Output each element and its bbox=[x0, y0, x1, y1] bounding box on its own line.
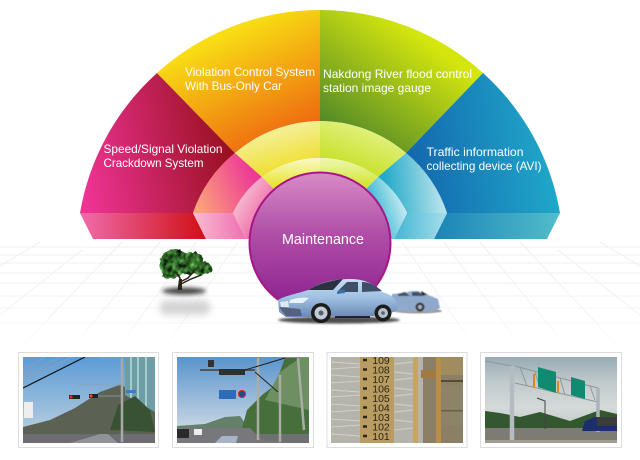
band drop shadow bbox=[95, 238, 545, 242]
photo: bus lane sign bbox=[172, 352, 314, 448]
panel: speed and signal violation sector bbox=[80, 73, 235, 239]
panel: speed and signal violation sector: Speed/Signal Violation bbox=[104, 142, 222, 156]
panel: speed and signal violation sector: Crackdown System bbox=[104, 156, 204, 170]
maintenance circle: Maintenance bbox=[282, 231, 364, 248]
photo: traffic signal bbox=[18, 352, 158, 448]
panel: violation control sector bbox=[157, 10, 320, 153]
floor grid bbox=[0, 238, 640, 350]
photo: flood gauge: 107 bbox=[372, 374, 390, 386]
photo: gantry sign bbox=[480, 352, 622, 448]
panel: violation control sector: Violation Control System bbox=[185, 65, 315, 79]
photo: flood gauge: 105 bbox=[372, 393, 390, 405]
icon: front car bbox=[278, 279, 400, 324]
inner ring bbox=[233, 158, 407, 239]
photo: flood gauge: 106 bbox=[372, 384, 390, 396]
icon: rear car bbox=[392, 291, 442, 314]
panel: flood control sector bbox=[320, 10, 483, 153]
semicircle diagram bbox=[80, 10, 560, 239]
panel: traffic information sector bbox=[406, 73, 560, 239]
photo: flood gauge bbox=[327, 352, 467, 448]
icon: tree bbox=[160, 249, 212, 315]
middle ring bbox=[193, 121, 447, 239]
panel: flood control sector: station image gauge bbox=[323, 81, 431, 95]
photo: flood gauge: 109 bbox=[372, 355, 390, 367]
maintenance circle bbox=[250, 172, 390, 314]
photo: flood gauge: 103 bbox=[372, 412, 390, 424]
photo: flood gauge: 108 bbox=[372, 364, 390, 376]
photo: flood gauge: 104 bbox=[372, 402, 390, 414]
photo: flood gauge: 102 bbox=[372, 422, 390, 434]
photo: flood gauge: 101 bbox=[372, 431, 390, 443]
panel: violation control sector: With Bus-Only Car bbox=[185, 79, 282, 93]
panel: traffic information sector: collecting device (AVI) bbox=[426, 159, 542, 173]
panel: traffic information sector: Traffic information bbox=[426, 145, 524, 159]
panel: flood control sector: Nakdong River flood control bbox=[323, 67, 472, 81]
